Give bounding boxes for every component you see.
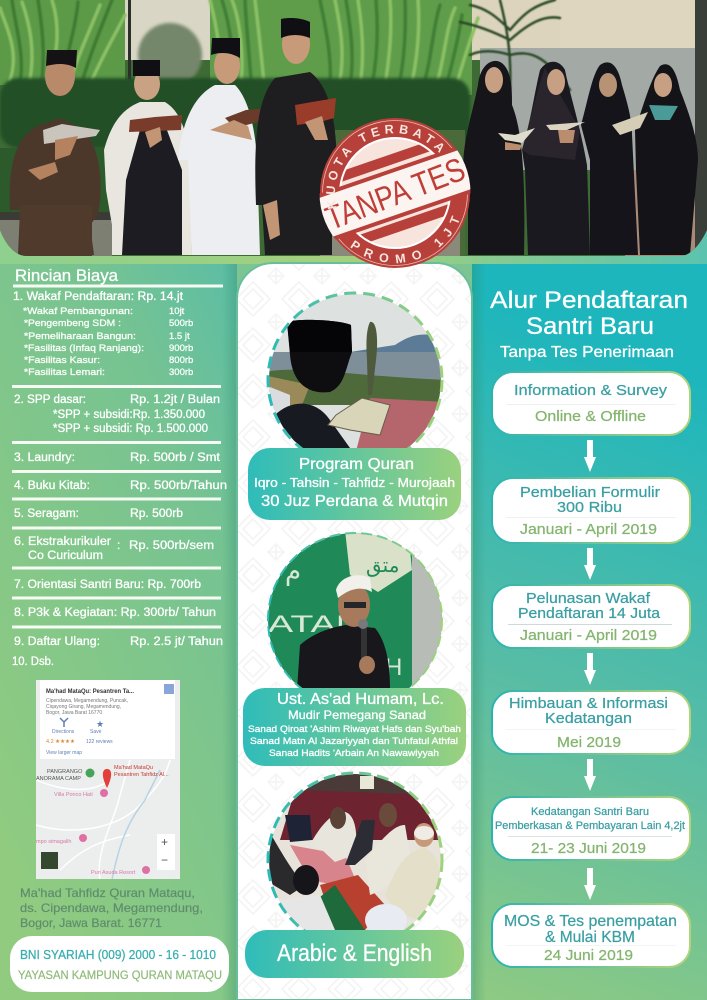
item 1: Wakaf Pendaftaran: *Fasilitas Lemari: <box>24 367 105 378</box>
heading: Alur Pendaftaran <box>490 287 688 361</box>
dashed ring <box>268 773 442 947</box>
boy 1 in brown robe <box>10 50 101 256</box>
address text: ds. Cipendawa, Megamendung, <box>20 901 203 915</box>
step 4: Himbauan & Informasi: Mei 2019 <box>557 734 621 751</box>
items 3 to 5: Rp. 500rb / Smt <box>130 452 221 464</box>
right column edge shadow <box>472 262 486 1000</box>
stamp headline: TANPA TES <box>320 150 470 237</box>
heading: Alur Pendaftaran: Tanpa Tes Penerimaan <box>500 344 674 361</box>
items 3 to 5 <box>14 452 227 520</box>
step 1: Information & Survey: Information & Survey <box>514 382 668 399</box>
caption pill: Program Quran <box>248 448 461 520</box>
map info card: Ma'had MataQu: Pesantren Ta... <box>46 689 134 695</box>
map info card: Ciqayong Girang, Megamendung, <box>46 704 121 710</box>
bank account card: BNI SYARIAH (009) 2000 - 16 - 1010 <box>20 948 216 962</box>
heading: Alur Pendaftaran: Santri Baru <box>526 313 654 340</box>
caption pill: Program Quran: 30 Juz Perdana & Mutqin <box>261 493 448 510</box>
caption pill: Program Quran: Iqro - Tahsin - Tahfidz - Murojaah <box>254 476 455 490</box>
item 6: Ekstrakurikuler: : <box>117 540 120 552</box>
step 6: MOS & Tes penempatan: 24 Juni 2019 <box>544 947 633 964</box>
step 3: Pelunasan Wakaf <box>492 585 690 648</box>
step 2: Pembelian Formulir: Pembelian Formulir <box>520 484 660 501</box>
step 4: Himbauan & Informasi: Himbauan & Informasi <box>509 695 668 712</box>
item 6: Ekstrakurikuler: 6. Ekstrakurikuler <box>14 536 111 548</box>
step 6: MOS & Tes penempatan: & Mulai KBM <box>545 929 635 946</box>
address text <box>20 886 203 930</box>
items 3 to 5: 5. Seragam: <box>14 508 79 520</box>
items 7 to 10: 10. Dsb. <box>12 656 54 668</box>
dashed ring <box>268 533 442 707</box>
arrow 1 <box>584 440 596 472</box>
items 3 to 5: 3. Laundry: <box>14 452 75 464</box>
items 3 to 5: Rp. 500rb <box>130 508 183 520</box>
item 2: SPP dasar <box>14 394 220 435</box>
map info card: 4.2 ★★★★ <box>46 739 75 745</box>
location map <box>36 680 180 880</box>
stamp: Tanpa Tes <box>320 118 470 268</box>
step 6: MOS & Tes penempatan <box>492 904 690 967</box>
items 7 to 10: 8. P3k & Kegiatan: Rp. 300rb/ Tahun <box>14 607 216 619</box>
map labels: ANORAMA CAMP <box>36 776 81 782</box>
map zoom controls: − <box>161 853 168 867</box>
caption pill: Ust. As'ad Humam <box>243 688 466 766</box>
item 1: Wakaf Pendaftaran: 1.5 jt <box>169 331 190 342</box>
step 4: Himbauan & Informasi <box>492 691 690 754</box>
panel: Arabic & English <box>266 772 444 930</box>
step 5: Kedatangan Santri Baru: Kedatangan Santri Baru <box>531 806 649 818</box>
girls in black hijab and gown <box>463 61 698 255</box>
bank account card <box>10 936 229 992</box>
step 5: Kedatangan Santri Baru: Pemberkasan & Pembayaran Lain 4,2jt <box>495 820 685 832</box>
caption pill: Ust. As'ad Humam: Ust. As'ad Humam, Lc. <box>277 691 444 708</box>
item 1: Wakaf Pendaftaran: 900rb <box>169 343 193 354</box>
item 2: SPP dasar: *SPP + subsidi: Rp. 1.500.000 <box>53 423 208 435</box>
step 3: Pelunasan Wakaf: Januari - April 2019 <box>520 627 657 644</box>
map info card: Bogor, Jawa Barat 16770 <box>46 710 102 716</box>
item 1: Wakaf Pendaftaran: *Pengembeng SDM : <box>24 318 121 329</box>
bank account card: YAYASAN KAMPUNG QURAN MATAQU <box>18 970 222 982</box>
panel: Rincian Biaya <box>12 267 227 668</box>
panel: Ust. As'ad Humam <box>267 532 443 688</box>
step 2: Pembelian Formulir: 300 Ribu <box>557 499 622 516</box>
item 1: Wakaf Pendaftaran: 500rb <box>169 318 193 329</box>
caption pill: Ust. As'ad Humam: Sanad Qiroat 'Ashim Riwayat Hafs dan Syu'bah <box>248 724 461 735</box>
panel: Program Quran <box>266 292 444 448</box>
step 6: MOS & Tes penempatan: MOS & Tes penempatan <box>504 913 677 930</box>
heading: Alur Pendaftaran: Alur Pendaftaran <box>490 287 688 314</box>
map labels: PANGRANGO <box>47 769 83 775</box>
map pin: Ma'had MataQu <box>114 765 153 771</box>
step 3: Pelunasan Wakaf: Pelunasan Wakaf <box>526 590 651 607</box>
caption pill: Arabic & English <box>245 930 464 978</box>
step 1: Information & Survey: Online & Offline <box>535 408 646 425</box>
item 2: SPP dasar: Rp. 1.2jt / Bulan <box>130 394 220 406</box>
map labels: Puri Asuda Resort <box>91 870 136 876</box>
items 7 to 10: 7. Orientasi Santri Baru: Rp. 700rb <box>14 579 201 591</box>
item 6: Ekstrakurikuler: Rp. 500rb/sem <box>129 540 214 552</box>
map pin <box>103 765 169 788</box>
header photo: students holding Qurans <box>0 0 707 256</box>
photo: reading Quran on a hill <box>269 294 441 448</box>
item 1: Wakaf Pendaftaran: *Fasilitas (Infaq Ranjang): <box>24 343 144 354</box>
boy 3 in white robe <box>178 38 260 255</box>
caption pill: Program Quran: Program Quran <box>299 456 414 473</box>
items 3 to 5: Rp. 500rb/Tahun <box>130 480 227 492</box>
item 1: Wakaf Pendaftaran: 800rb <box>169 355 193 366</box>
caption pill: Ust. As'ad Humam: Mudir Pemegang Sanad <box>288 708 426 722</box>
caption pill: Arabic & English: Arabic & English <box>277 940 432 967</box>
photo: speaker at microphone: ATAN <box>268 611 363 638</box>
map info card: 122 reviews <box>86 739 113 745</box>
boy 2 in white shawl <box>104 60 192 255</box>
item 1: Wakaf Pendaftaran: 300rb <box>169 367 193 378</box>
items 3 to 5: 4. Buku Kitab: <box>14 480 90 492</box>
map labels: Villa Ponco Hati <box>54 792 93 798</box>
step 2: Pembelian Formulir: Januari - April 2019 <box>520 521 657 538</box>
background left column <box>0 250 237 1000</box>
dashed ring <box>268 293 442 467</box>
step 3: Pelunasan Wakaf: Pendaftaran 14 Juta <box>518 605 661 622</box>
map info card: ★ <box>96 719 104 729</box>
cost list dividers <box>12 284 223 628</box>
map pin: Pesantren Tahfidz Al... <box>114 772 169 778</box>
map info card <box>40 680 175 759</box>
item 1: Wakaf Pendaftaran: *Pemeliharaan Bangun: <box>24 331 136 342</box>
item 6: Ekstrakurikuler: Co Curiculum <box>28 550 103 562</box>
heading: Rincian Biaya: Rincian Biaya <box>15 267 119 285</box>
map labels <box>36 768 150 876</box>
item 1: Wakaf Pendaftaran: *Fasilitas Kasur: <box>24 355 100 366</box>
item 2: SPP dasar: *SPP + subsidi:Rp. 1.350.000 <box>53 409 205 421</box>
photo: speaker at microphone: م <box>285 556 301 586</box>
item 6: Ekstrakurikuler <box>14 536 214 562</box>
boy 4 in black robe <box>255 18 337 255</box>
address text: Bogor, Jawa Barat. 16771 <box>20 916 162 930</box>
step 1: Information & Survey <box>492 372 690 435</box>
left column edge shadow <box>222 262 237 1000</box>
map info card: Directions <box>52 729 75 735</box>
map satellite thumb <box>41 852 58 869</box>
address text: Ma'had Tahfidz Quran Mataqu, <box>20 886 195 900</box>
step 4: Himbauan & Informasi: Kedatangan <box>545 710 632 727</box>
photo: speaker at microphone: H <box>385 654 402 681</box>
photo: speaker at microphone <box>268 533 442 688</box>
background right column <box>472 250 707 1000</box>
map info card: Cipendawa, Megamendung, Puncak, <box>46 698 128 704</box>
item 1: Wakaf Pendaftaran: 10jt <box>169 306 185 317</box>
item 1: Wakaf Pendaftaran: 1. Wakaf Pendaftaran: Rp. 14.jt <box>13 291 184 303</box>
map labels: mpo simagalih <box>36 839 71 845</box>
map zoom controls: + <box>161 835 168 849</box>
caption pill: Ust. As'ad Humam: Sanad Matn Al Jazariyyah dan Tuhfatul Athfal <box>250 736 458 747</box>
item 2: SPP dasar: 2. SPP dasar: <box>14 394 86 406</box>
arrow 2 <box>584 548 596 580</box>
arrow 5 <box>584 868 596 900</box>
header green band <box>0 225 707 264</box>
stamp arc text bottom: PROMO 1JT <box>350 215 460 264</box>
items 7 to 10: 9. Daftar Ulang: <box>14 636 100 648</box>
photo: seated discussion circle <box>269 774 441 930</box>
arrow 4 <box>584 759 596 791</box>
center white panel <box>237 263 472 1000</box>
item 1: Wakaf Pendaftaran: *Wakaf Pembangunan: <box>23 306 133 317</box>
item 1: Wakaf Pendaftaran <box>13 291 193 378</box>
map info card: View larger map <box>46 750 82 756</box>
caption pill: Ust. As'ad Humam: Sanad Hadits 'Arbain An Nawawiyyah <box>269 748 439 759</box>
items 7 to 10: Rp. 2.5 jt/ Tahun <box>130 636 223 648</box>
step 2: Pembelian Formulir <box>492 478 690 543</box>
step 5: Kedatangan Santri Baru <box>492 797 690 860</box>
map info card: Save <box>90 729 102 735</box>
items 7 to 10 <box>12 579 223 668</box>
photo: speaker at microphone: متق <box>366 555 399 577</box>
step 5: Kedatangan Santri Baru: 21- 23 Juni 2019 <box>531 840 646 857</box>
map zoom controls <box>157 834 175 870</box>
arrow 3 <box>584 653 596 685</box>
